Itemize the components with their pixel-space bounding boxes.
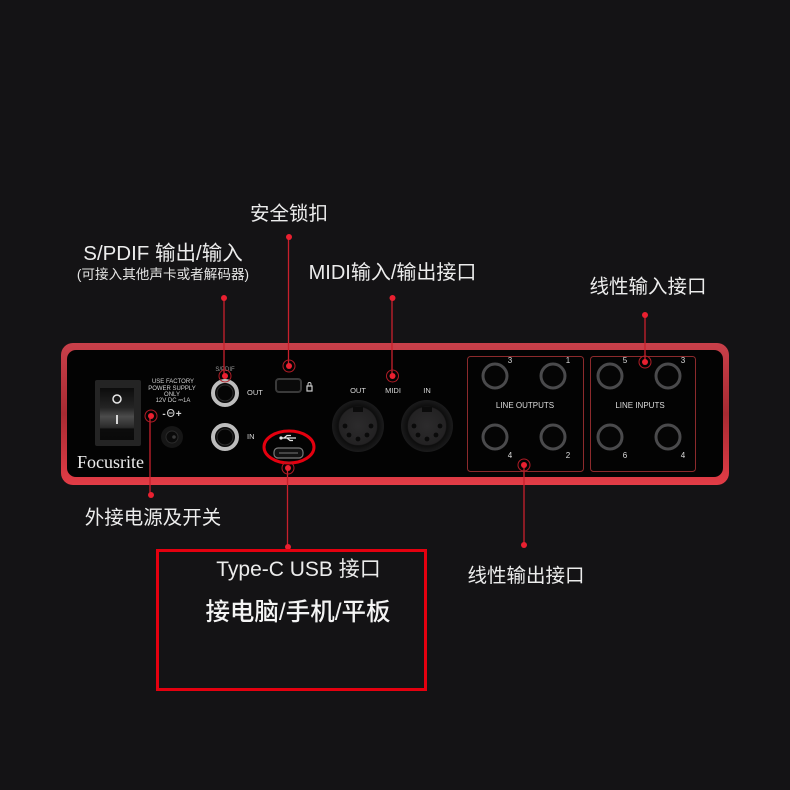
callout line: MIDI	[386, 295, 398, 382]
callout line: USB	[282, 462, 294, 550]
label: S/PDIF output and input: S/PDIF 输出/输入	[83, 242, 243, 265]
security lock slot	[276, 379, 312, 392]
power supply notice: USE FACTORY	[152, 379, 194, 385]
callout line: line inputs	[639, 312, 651, 368]
DC power socket	[161, 426, 183, 448]
label: security lock: 安全锁扣	[250, 203, 328, 225]
USB port highlight ellipse	[264, 431, 314, 463]
power supply notice: -⊖+	[162, 408, 182, 420]
label: connect devices: 接电脑/手机/平板	[205, 598, 391, 626]
Focusrite logo: Focusrite	[77, 452, 144, 472]
line inputs group: 3	[681, 356, 686, 365]
callout line: S/PDIF	[219, 295, 231, 382]
line outputs group: 3	[508, 356, 513, 365]
label: line inputs: 线性输入接口	[589, 276, 707, 298]
MIDI OUT label: OUT	[350, 386, 366, 395]
USB-C port	[274, 436, 303, 458]
OUT label: OUT	[247, 388, 263, 397]
MIDI out socket	[332, 400, 384, 452]
power supply notice: 12V DC ⎓1A	[156, 398, 190, 404]
label: line outputs: 线性输出接口	[467, 565, 585, 587]
S/PDIF label: S/PDIF	[215, 367, 235, 373]
line inputs group: 6	[623, 451, 628, 460]
Type-C callout box	[158, 550, 426, 690]
power supply notice: ONLY	[164, 392, 180, 398]
S/PDIF in jack	[213, 425, 237, 449]
line inputs group: 5	[623, 356, 628, 365]
callout line: power	[145, 410, 157, 498]
line outputs group: 4	[508, 451, 513, 460]
label: Type-C USB: Type-C USB 接口	[216, 558, 381, 581]
black panel	[67, 350, 723, 477]
line outputs group: LINE OUTPUTS	[496, 401, 554, 410]
label: S/PDIF note: (可接入其他声卡或者解码器)	[77, 266, 249, 282]
MIDI IN label: IN	[423, 386, 431, 395]
label: power and switch: 外接电源及开关	[85, 507, 221, 529]
callout line: line outputs	[518, 459, 530, 548]
line outputs group: 2	[566, 451, 571, 460]
power supply notice	[148, 379, 196, 420]
line inputs group	[590, 356, 696, 472]
audio interface back panel	[61, 343, 729, 485]
line inputs group: LINE INPUTS	[615, 401, 665, 410]
line outputs group	[468, 356, 584, 472]
rocker power switch	[95, 380, 141, 446]
MIDI in socket	[401, 400, 453, 452]
red chassis	[61, 343, 729, 485]
line outputs group: 1	[566, 356, 571, 365]
label: MIDI: MIDI输入/输出接口	[309, 261, 476, 284]
MIDI label: MIDI	[385, 386, 401, 395]
power supply notice: POWER SUPPLY	[148, 386, 196, 392]
S/PDIF out jack	[213, 381, 237, 405]
callout line: lock	[283, 234, 295, 372]
line inputs group: 4	[681, 451, 686, 460]
IN label: IN	[247, 432, 254, 441]
